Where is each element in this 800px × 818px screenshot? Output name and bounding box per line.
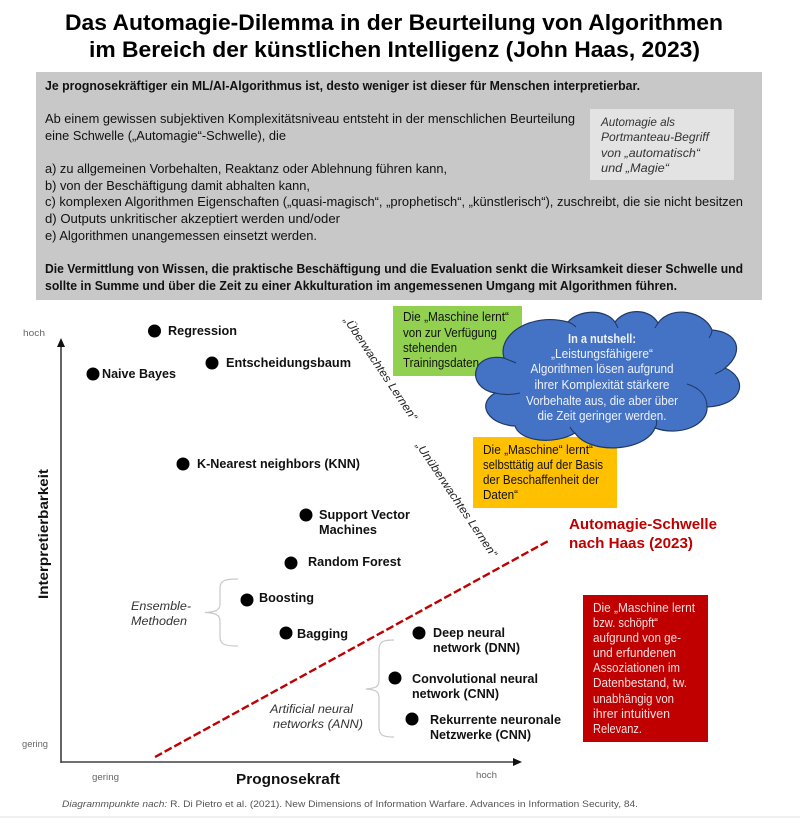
text block: list of effects: b) von der Beschäftigung damit abhalten kann,	[45, 179, 310, 193]
point: Regression: Regression	[168, 324, 237, 338]
threshold line	[155, 540, 550, 757]
callout: generative learning	[583, 595, 708, 742]
text block: conclusion	[45, 262, 743, 293]
point: Convolutional neural network	[388, 672, 538, 701]
threshold label	[569, 516, 717, 552]
callout: supervised learning	[393, 306, 522, 376]
text block: conclusion: sollte in Summe und über die Zeit zu einer Akkulturation im angemessenen Umgang mit Algorithmen führen.	[45, 279, 677, 293]
source note: Diagrammpunkte nach: R. Di Pietro et al. (2021). New Dimensions of Information Warfare. Advances in Information Security, 84.	[62, 799, 638, 810]
callout: generative learning: Relevanz.	[593, 722, 642, 736]
callout: in a nutshell cloud: Vorbehalte aus, die aber über	[526, 394, 678, 408]
point: Rekurrente neuronale Netzwerke: Rekurrente neuronale	[430, 713, 561, 727]
callout: in a nutshell cloud: die Zeit geringer werden.	[538, 409, 666, 423]
point: Boosting: Boosting	[259, 591, 314, 605]
point: KNN: K-Nearest neighbors (KNN)	[197, 457, 360, 471]
callout: generative learning: und erfundenen	[593, 646, 676, 660]
point: Boosting	[240, 591, 314, 606]
callout: generative learning: Die „Maschine lernt	[593, 601, 695, 615]
callout: portmanteau note: Automagie als	[600, 115, 675, 129]
callout: generative learning: unabhängig von	[593, 692, 674, 706]
label: artificial neural networks: Artificial neural	[269, 702, 353, 716]
title: im Bereich der künstlichen Intelligenz (John Haas, 2023)	[89, 37, 700, 62]
point: Convolutional neural network: network (CNN)	[412, 687, 499, 701]
callout: portmanteau note: Portmanteau-Begriff	[601, 130, 711, 144]
title	[65, 10, 723, 62]
text block: threshold intro: eine Schwelle („Automagie“-Schwelle), die	[45, 129, 286, 143]
callout: unsupervised learning: Daten“	[483, 488, 518, 502]
callout: in a nutshell cloud: Algorithmen lösen aufgrund	[530, 362, 674, 376]
rotated label: supervised: „Überwachtes Lernen“	[340, 314, 420, 424]
text block: list of effects	[45, 162, 743, 243]
threshold label: Automagie-Schwelle	[569, 516, 717, 533]
callout: portmanteau note: von „automatisch“	[601, 146, 701, 160]
text block: conclusion: Die Vermittlung von Wissen, die praktische Beschäftigung und die Evaluation senkt die Wirksamkeit dieser Schwelle und	[45, 262, 743, 276]
callout: generative learning: bzw. schöpft“	[593, 616, 658, 630]
brace: artificial neural networks	[366, 640, 394, 737]
callout: portmanteau note: und „Magie“	[601, 161, 670, 175]
label: artificial neural networks: networks (ANN)	[273, 717, 363, 731]
callout: generative learning: Datenbestand, tw.	[593, 676, 687, 690]
callout: portmanteau note	[590, 109, 734, 180]
y axis low label: gering	[22, 739, 48, 749]
callout: in a nutshell cloud: „Leistungsfähigere“	[551, 347, 653, 361]
y axis title: Interpretierbarkeit	[35, 469, 51, 599]
heading: key statement: Je prognosekräftiger ein ML/AI-Algorithmus ist, desto weniger ist dieser für Menschen interpretierbar.	[45, 79, 640, 93]
callout: supervised learning: Trainingsdaten	[403, 356, 479, 370]
x axis high label: hoch	[476, 770, 497, 780]
point: Support Vector Machines: Machines	[319, 523, 377, 537]
callout: unsupervised learning: der Beschaffenheit der	[483, 473, 599, 487]
x axis title: Prognosekraft	[236, 771, 340, 788]
panel: explanation	[36, 72, 762, 300]
callout: in a nutshell cloud: In a nutshell:	[568, 332, 636, 346]
point: Support Vector Machines	[300, 508, 410, 537]
point: Convolutional neural network: Convolutional neural	[412, 672, 538, 686]
text block: threshold intro	[45, 112, 575, 143]
rotated label: unsupervised: „Unüberwachtes Lernen“	[412, 439, 500, 561]
label: ensemble methods	[131, 599, 191, 628]
label: artificial neural networks	[269, 702, 363, 731]
callout: generative learning: aufgrund von ge-	[593, 631, 681, 645]
callout: unsupervised learning: Die „Maschine“ lernt“	[483, 443, 593, 457]
point: Support Vector Machines: Support Vector	[319, 508, 410, 522]
callout: supervised learning: von zur Verfügung	[403, 326, 497, 340]
brace: ensemble methods	[205, 579, 238, 646]
callout: in a nutshell cloud	[476, 312, 740, 448]
callout: in a nutshell cloud: ihrer Komplexität stärkere	[534, 378, 670, 392]
point: Rekurrente neuronale Netzwerke: Netzwerke (CNN)	[430, 728, 531, 742]
point: Deep neural network	[412, 626, 520, 655]
text block: list of effects: a) zu allgemeinen Vorbehalten, Reaktanz oder Ablehnung führen kann,	[45, 162, 447, 176]
label: ensemble methods: Ensemble-	[131, 599, 191, 613]
point: Random Forest: Random Forest	[308, 555, 402, 569]
label: ensemble methods: Methoden	[131, 614, 187, 628]
text block: list of effects: c) komplexen Algorithmen Eigenschaften („quasi-magisch“, „prophetisch“, „künstlerisch“), zuschreibt, die sie nicht besitzen	[45, 195, 743, 209]
callout: supervised learning: stehenden	[403, 341, 457, 355]
y axis high label: hoch	[23, 328, 45, 338]
x axis arrow	[61, 758, 522, 766]
title: Das Automagie-Dilemma in der Beurteilung von Algorithmen	[65, 10, 723, 35]
point: Bagging: Bagging	[297, 627, 348, 641]
callout: unsupervised learning: selbsttätig auf der Basis	[483, 458, 603, 472]
text block: list of effects: d) Outputs unkritischer akzeptiert werden und/oder	[45, 212, 340, 226]
point: Rekurrente neuronale Netzwerke	[406, 712, 561, 742]
point: Deep neural network: Deep neural	[433, 626, 505, 640]
text block: threshold intro: Ab einem gewissen subjektiven Komplexitätsniveau entsteht in der menschlichen Beurteilung	[45, 112, 575, 126]
chart: interpretability vs predictive power	[22, 314, 717, 788]
point: Deep neural network: network (DNN)	[433, 641, 520, 655]
callout: generative learning: ihrer intuitiven	[593, 707, 670, 721]
callout: generative learning: Assoziationen im	[593, 661, 680, 675]
point: Naive Bayes: Naive Bayes	[102, 367, 176, 381]
text block: list of effects: e) Algorithmen unangemessen einsetzt werden.	[45, 229, 317, 243]
point: Entscheidungsbaum: Entscheidungsbaum	[226, 356, 351, 370]
threshold label: nach Haas (2023)	[569, 535, 693, 552]
y axis arrow	[57, 338, 65, 763]
callout: supervised learning: Die „Maschine lernt“	[403, 310, 509, 324]
callout: unsupervised learning	[473, 437, 617, 508]
x axis low label: gering	[92, 772, 119, 782]
